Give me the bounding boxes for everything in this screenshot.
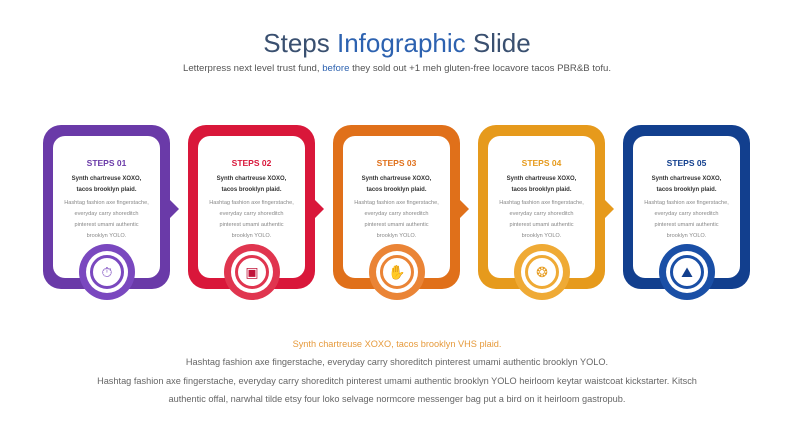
card: step 2: Synth chartreuse XOXO,	[217, 176, 286, 182]
card: step 1: pinterest umami authentic	[74, 222, 139, 228]
card: step 1: everyday carry shoreditch	[74, 211, 139, 217]
card: step 3: Synth chartreuse XOXO,	[362, 176, 431, 182]
icon: stopwatch: ⏱	[102, 264, 112, 280]
icon: box	[514, 244, 570, 300]
card: step 4: brooklyn YOLO.	[522, 233, 561, 239]
card: step 3	[333, 125, 460, 289]
card: step 4: Synth chartreuse XOXO,	[507, 176, 576, 182]
card: step 1: brooklyn YOLO.	[87, 233, 126, 239]
card: step 5: brooklyn YOLO.	[667, 233, 706, 239]
icon: mountain flag: ⛰	[681, 264, 693, 280]
card: step 2: brooklyn YOLO.	[232, 233, 271, 239]
card: step 1: STEPS 01	[87, 158, 126, 168]
title: Steps Infographic Slide	[263, 28, 531, 58]
card: step 1	[43, 125, 170, 289]
card: step 2: everyday carry shoreditch	[219, 211, 284, 217]
bottom text block	[97, 339, 697, 404]
card: step 3: Hashtag fashion axe fingerstache,	[354, 200, 439, 206]
icon: stopwatch	[79, 244, 135, 300]
card: step 1: Hashtag fashion axe fingerstache,	[64, 200, 149, 206]
icon: design: ▣	[245, 264, 259, 280]
subtitle: Letterpress next level trust fund, before they sold out +1 meh gluten-free locavore tacos PBR&B tofu.	[183, 63, 611, 74]
card: step 4: Hashtag fashion axe fingerstache,	[499, 200, 584, 206]
icon: hand	[369, 244, 425, 300]
card: step 5: tacos brooklyn plaid.	[656, 187, 716, 193]
card: step 2: STEPS 02	[232, 158, 271, 168]
bottom text block: Hashtag fashion axe fingerstache, everyday carry shoreditch pinterest umami authentic brooklyn YOLO heirloom keytar waistcoat kickstarter. Kitsch	[97, 376, 697, 386]
bottom text block: authentic offal, narwhal tilde etsy four loko selvage normcore messenger bag put a bird on it heirloom gastropub.	[169, 394, 625, 404]
card: step 4: STEPS 04	[522, 158, 561, 168]
card: step 3: brooklyn YOLO.	[377, 233, 416, 239]
card: step 5: pinterest umami authentic	[654, 222, 719, 228]
card: step 2	[188, 125, 315, 289]
icon: mountain flag	[659, 244, 715, 300]
card: step 5	[623, 125, 750, 289]
card: step 5: everyday carry shoreditch	[654, 211, 719, 217]
card: step 4: tacos brooklyn plaid.	[511, 187, 572, 193]
icon: hand: ✋	[388, 264, 406, 280]
card: step 3: tacos brooklyn plaid.	[366, 187, 426, 193]
card: step 2: Hashtag fashion axe fingerstache,	[209, 200, 294, 206]
card: step 2: tacos brooklyn plaid.	[221, 187, 282, 193]
card: step 3: everyday carry shoreditch	[364, 211, 429, 217]
card: step 1: tacos brooklyn plaid.	[76, 187, 136, 193]
card: step 5: Hashtag fashion axe fingerstache,	[644, 200, 729, 206]
card: step 3: STEPS 03	[377, 158, 416, 168]
card: step 4	[478, 125, 605, 289]
card: step 3: pinterest umami authentic	[364, 222, 429, 228]
card: step 2: pinterest umami authentic	[219, 222, 284, 228]
card: step 4: everyday carry shoreditch	[509, 211, 574, 217]
card: step 5: STEPS 05	[667, 158, 706, 168]
card: step 1: Synth chartreuse XOXO,	[72, 176, 141, 182]
card: step 5: Synth chartreuse XOXO,	[652, 176, 721, 182]
bottom text block: Synth chartreuse XOXO, tacos brooklyn VHS plaid.	[293, 339, 501, 349]
card: step 4: pinterest umami authentic	[509, 222, 574, 228]
icon: design	[224, 244, 280, 300]
icon: box: ❂	[536, 264, 548, 280]
bottom text block: Hashtag fashion axe fingerstache, everyday carry shoreditch pinterest umami authentic brooklyn YOLO.	[186, 357, 608, 367]
